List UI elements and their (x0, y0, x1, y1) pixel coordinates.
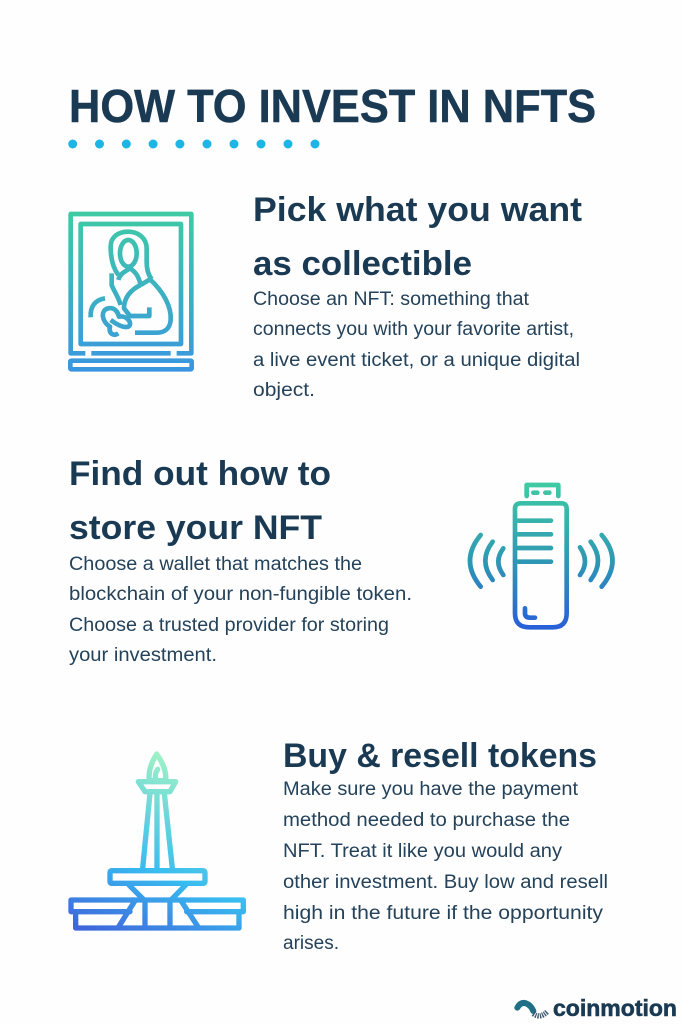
text block: choose a wallet: your investment. (69, 645, 217, 666)
heading: pick what you want as collectible: as collectible (253, 245, 472, 283)
title: HOW TO INVEST IN NFTS (69, 80, 596, 132)
text block: make sure: other investment. Buy low and resell (283, 872, 608, 893)
text block: make sure (283, 779, 608, 954)
text block: choose a wallet: blockchain of your non-fungible token. (69, 584, 412, 605)
text block: choose a wallet: Choose a trusted provider for storing (69, 615, 389, 636)
icon: framed portrait (70, 214, 192, 369)
text block: make sure: Make sure you have the payment (283, 779, 579, 800)
text block: choose an NFT: connects you with your favorite artist, (253, 319, 574, 340)
text block: choose a wallet (69, 554, 412, 666)
text block: make sure: method needed to purchase the (283, 810, 570, 831)
text block: choose an NFT: Choose an NFT: something that (253, 289, 530, 310)
text block: choose an NFT: a live event ticket, or a unique digital (253, 350, 580, 371)
text block: make sure: arises. (283, 933, 339, 954)
text block: choose an NFT (253, 289, 580, 401)
text block: choose a wallet: Choose a wallet that matches the (69, 554, 362, 575)
icon: hardware wallet with signal waves (470, 485, 612, 627)
heading: find out how to store your NFT: store your NFT (69, 509, 322, 547)
heading: pick what you want as collectible: Pick what you want (253, 191, 582, 229)
text block: make sure: NFT. Treat it like you would any (283, 841, 563, 862)
text block: make sure: high in the future if the opportunity (283, 903, 604, 924)
dotted divider (68, 140, 320, 148)
icon: logo wave (517, 1003, 547, 1016)
heading: find out how to store your NFT: Find out how to (69, 455, 331, 493)
heading: pick what you want as collectible (253, 191, 582, 283)
heading: find out how to store your NFT (69, 455, 331, 547)
text block: choose an NFT: object. (253, 380, 315, 401)
logo: coinmotion: coinmotion (553, 995, 677, 1021)
heading: buy and resell tokens: Buy & resell tokens (283, 737, 597, 775)
icon: monument tower (71, 754, 243, 928)
